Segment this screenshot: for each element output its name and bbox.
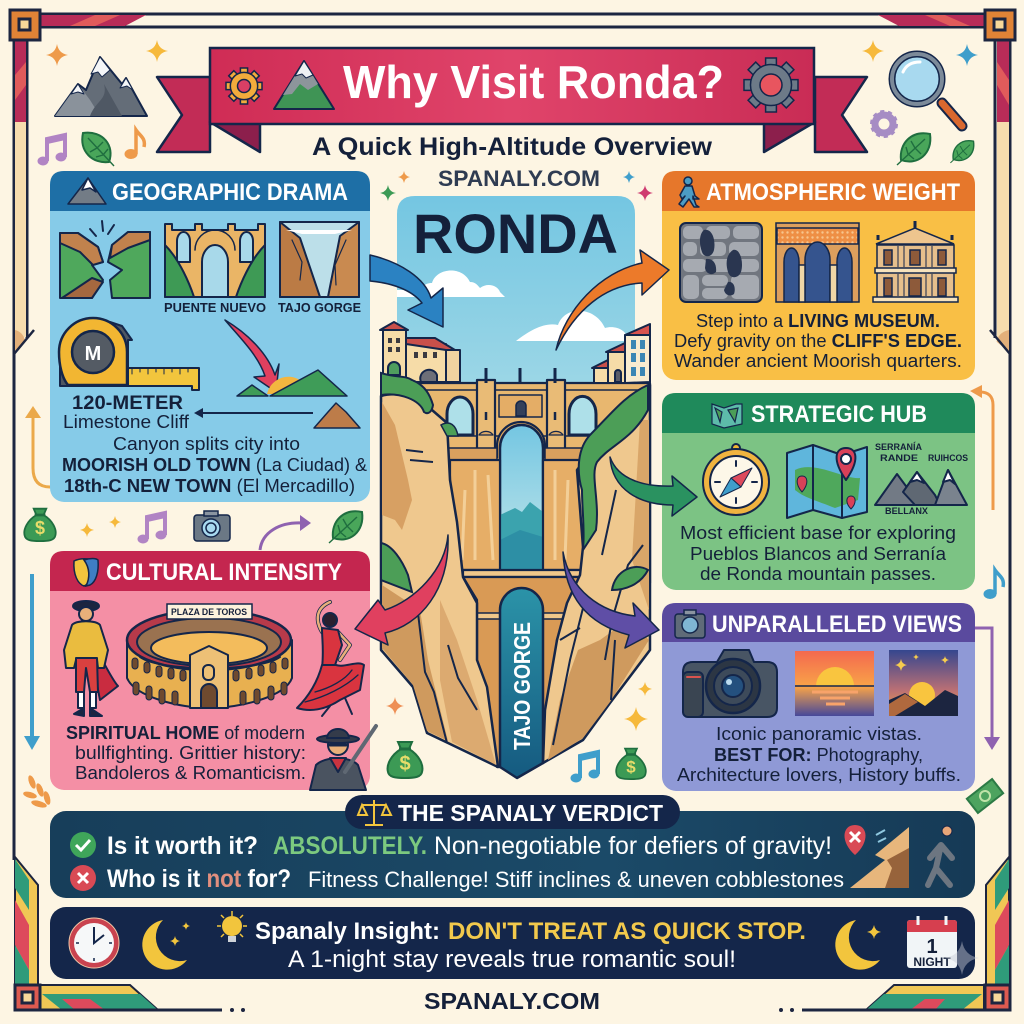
- icon: flamenco dancer: [297, 602, 364, 716]
- icon: cobblestones and footprints: [680, 223, 762, 302]
- insight line one: [255, 918, 806, 945]
- text: geographic body: MOORISH OLD TOWN (La Ciudad) &: [62, 455, 367, 475]
- icon: banner gear left: [226, 68, 262, 104]
- icon: moon left: [142, 920, 190, 970]
- icon: walking person: [679, 177, 699, 207]
- insight line two: A 1-night stay reveals true romantic soul!: [288, 946, 736, 973]
- icon: arrow purple: [563, 552, 659, 648]
- right cliff: [543, 385, 650, 763]
- text: views body: Architecture lovers, History buffs.: [677, 765, 961, 785]
- panel: atmospheric weight: [662, 171, 975, 380]
- icon: cross: [70, 865, 96, 891]
- gorge label: TAJO GORGE: [509, 622, 535, 750]
- icon: matador: [64, 601, 118, 716]
- icon: banner gear right: [744, 58, 798, 112]
- small decorative flow arrows: [24, 385, 1000, 750]
- label: Tajo Gorge: TAJO GORGE: [278, 300, 361, 315]
- bridge: [420, 380, 650, 778]
- panel: the Spanaly verdict: [50, 795, 975, 898]
- text: strategic body: Most efficient base for exploring: [680, 523, 956, 543]
- left cliff: [381, 394, 498, 767]
- title: Why Visit Ronda?: [343, 56, 724, 108]
- icon: red arrow and hills: [194, 320, 360, 428]
- decorative sparkles, notes, leaves: [22, 40, 1003, 813]
- text: cultural body: bullfighting. Grittier history:: [75, 743, 306, 763]
- verdict line one: Non-negotiable for defiers of gravity!: [434, 832, 832, 860]
- right town buildings: [592, 324, 650, 383]
- icon: Puente Nuevo: [165, 224, 265, 297]
- icon: calendar one night: [907, 916, 957, 969]
- text: strategic body: [680, 523, 956, 584]
- text: cultural body: SPIRITUAL HOME of modern: [66, 723, 305, 743]
- icon: small purple gear: [872, 112, 896, 136]
- map labels: RANDE: [880, 453, 918, 463]
- text: atmospheric body: Defy gravity on the CLIFF'S EDGE.: [674, 331, 962, 351]
- icon: mountains with labels: [875, 470, 967, 505]
- panel: geographic drama: [50, 171, 370, 502]
- icon: magnifying glass: [892, 54, 962, 126]
- text: geographic body: [62, 434, 367, 496]
- text: views body: [677, 724, 961, 785]
- verdict heading pill: THE SPANALY VERDICT: [398, 800, 663, 826]
- map labels: [875, 442, 968, 516]
- icon: folded map with pins: [787, 445, 867, 518]
- icon: split cliff: [60, 221, 150, 298]
- verdict heading pill: [345, 795, 680, 829]
- panel: cultural intensity: [50, 551, 376, 790]
- icon: arrow orange: [556, 250, 669, 350]
- icon: measuring tape: [59, 318, 199, 390]
- icon: Tajo Gorge: [280, 222, 359, 297]
- text: cultural body: Bandoleros & Romanticism.: [75, 763, 306, 783]
- icon: warning pin: [844, 825, 886, 855]
- text: 120-meter: 120-METER: [72, 393, 183, 414]
- icon: check: [70, 832, 96, 858]
- label: tape glyph: M: [85, 343, 101, 365]
- icon: clock: [69, 918, 119, 968]
- icon: DSLR camera: [683, 650, 777, 717]
- panel: unparalleled views: [662, 603, 975, 791]
- heading: ATMOSPHERIC WEIGHT: [706, 179, 960, 206]
- verdict line two: Who is it not for?: [107, 865, 291, 893]
- icon: neoclassical building: [873, 221, 958, 302]
- text: limestone cliff: Limestone Cliff: [63, 412, 190, 432]
- insight line one: Spanaly Insight:: [255, 918, 440, 945]
- icon: Moorish arches: [776, 223, 859, 302]
- verdict line one: ABSOLUTELY.: [273, 832, 427, 860]
- icon: light bulb: [217, 911, 247, 942]
- insight line one: DON'T TREAT AS QUICK STOP.: [448, 918, 806, 945]
- text: geographic body: Canyon splits city into: [113, 434, 300, 454]
- icon: mountain top left: [55, 57, 147, 116]
- icon: theatre masks: [74, 558, 98, 586]
- bottom-right coloured corner: [986, 857, 1009, 985]
- icon: small camera: [675, 610, 705, 638]
- icon: walker: [928, 826, 952, 885]
- title banner: [157, 48, 867, 152]
- subtitle: A Quick High-Altitude Overview: [312, 133, 713, 161]
- icon: bandolero: [310, 726, 376, 790]
- map labels: SERRANÍA: [875, 442, 922, 452]
- icon: compass: [703, 444, 769, 515]
- text: strategic body: de Ronda mountain passes.: [700, 564, 936, 584]
- bottom-left coloured corner: [15, 857, 38, 985]
- verdict line two: Fitness Challenge! Stiff inclines & uneven cobblestones: [308, 867, 844, 892]
- heading: CULTURAL INTENSITY: [106, 559, 342, 586]
- verdict line one: Is it worth it?: [107, 832, 258, 860]
- icon: night sky: [889, 650, 958, 716]
- icon: arrow blue: [370, 255, 443, 327]
- icon: moon right: [835, 920, 881, 970]
- icon: small camera above cultural panel: [194, 511, 230, 541]
- text: views body: Iconic panoramic vistas.: [716, 724, 922, 744]
- icon: header mountain: [68, 178, 106, 204]
- icon: calendar one night: NIGHT: [913, 955, 951, 969]
- text: views body: BEST FOR: Photography,: [714, 745, 923, 765]
- heading: STRATEGIC HUB: [751, 401, 927, 428]
- sign: Plaza de Toros: [167, 604, 252, 619]
- text: atmospheric body: Wander ancient Moorish quarters.: [674, 351, 962, 371]
- text: strategic body: Pueblos Blancos and Serranía: [690, 544, 947, 564]
- text: atmospheric body: Step into a LIVING MUSEUM.: [696, 311, 940, 331]
- heading: GEOGRAPHIC DRAMA: [112, 179, 348, 206]
- verdict line one: [107, 832, 832, 860]
- central illustration: Ronda bridge and gorge: [380, 196, 650, 778]
- lamp posts: [486, 368, 555, 383]
- map labels: RUIHCOS: [928, 453, 968, 463]
- footer site label: SPANALY.COM: [424, 988, 600, 1014]
- heading: RONDA: RONDA: [413, 202, 618, 265]
- map labels: BELLANX: [885, 506, 928, 516]
- label: Puente Nuevo: PUENTE NUEVO: [164, 300, 266, 315]
- panel: strategic hub: [662, 393, 975, 590]
- site label top: SPANALY.COM: [438, 166, 600, 191]
- text: atmospheric body: [674, 311, 962, 371]
- icon: steep cliff: [850, 827, 909, 888]
- icon: banner mountain: [274, 61, 334, 109]
- panel: Spanaly insight: [50, 907, 975, 979]
- heading: UNPARALLELED VIEWS: [712, 611, 962, 638]
- icon: calendar one night: 1: [926, 936, 938, 958]
- icon: folded map small: [712, 404, 742, 428]
- corner squares: [10, 10, 40, 40]
- icon: arrow red: [355, 535, 448, 645]
- text: geographic body: 18th-C NEW TOWN (El Mercadillo): [64, 476, 355, 496]
- verdict line two: [107, 865, 844, 893]
- sign: Plaza de Toros: PLAZA DE TOROS: [171, 607, 247, 617]
- text: cultural body: [66, 723, 306, 783]
- watermark sparkle: [945, 941, 979, 975]
- left town buildings: [380, 322, 460, 382]
- icon: arrow green: [610, 457, 697, 516]
- clouds: [397, 270, 628, 341]
- icon: bullring: [127, 610, 292, 708]
- icon: sunset: [795, 651, 874, 716]
